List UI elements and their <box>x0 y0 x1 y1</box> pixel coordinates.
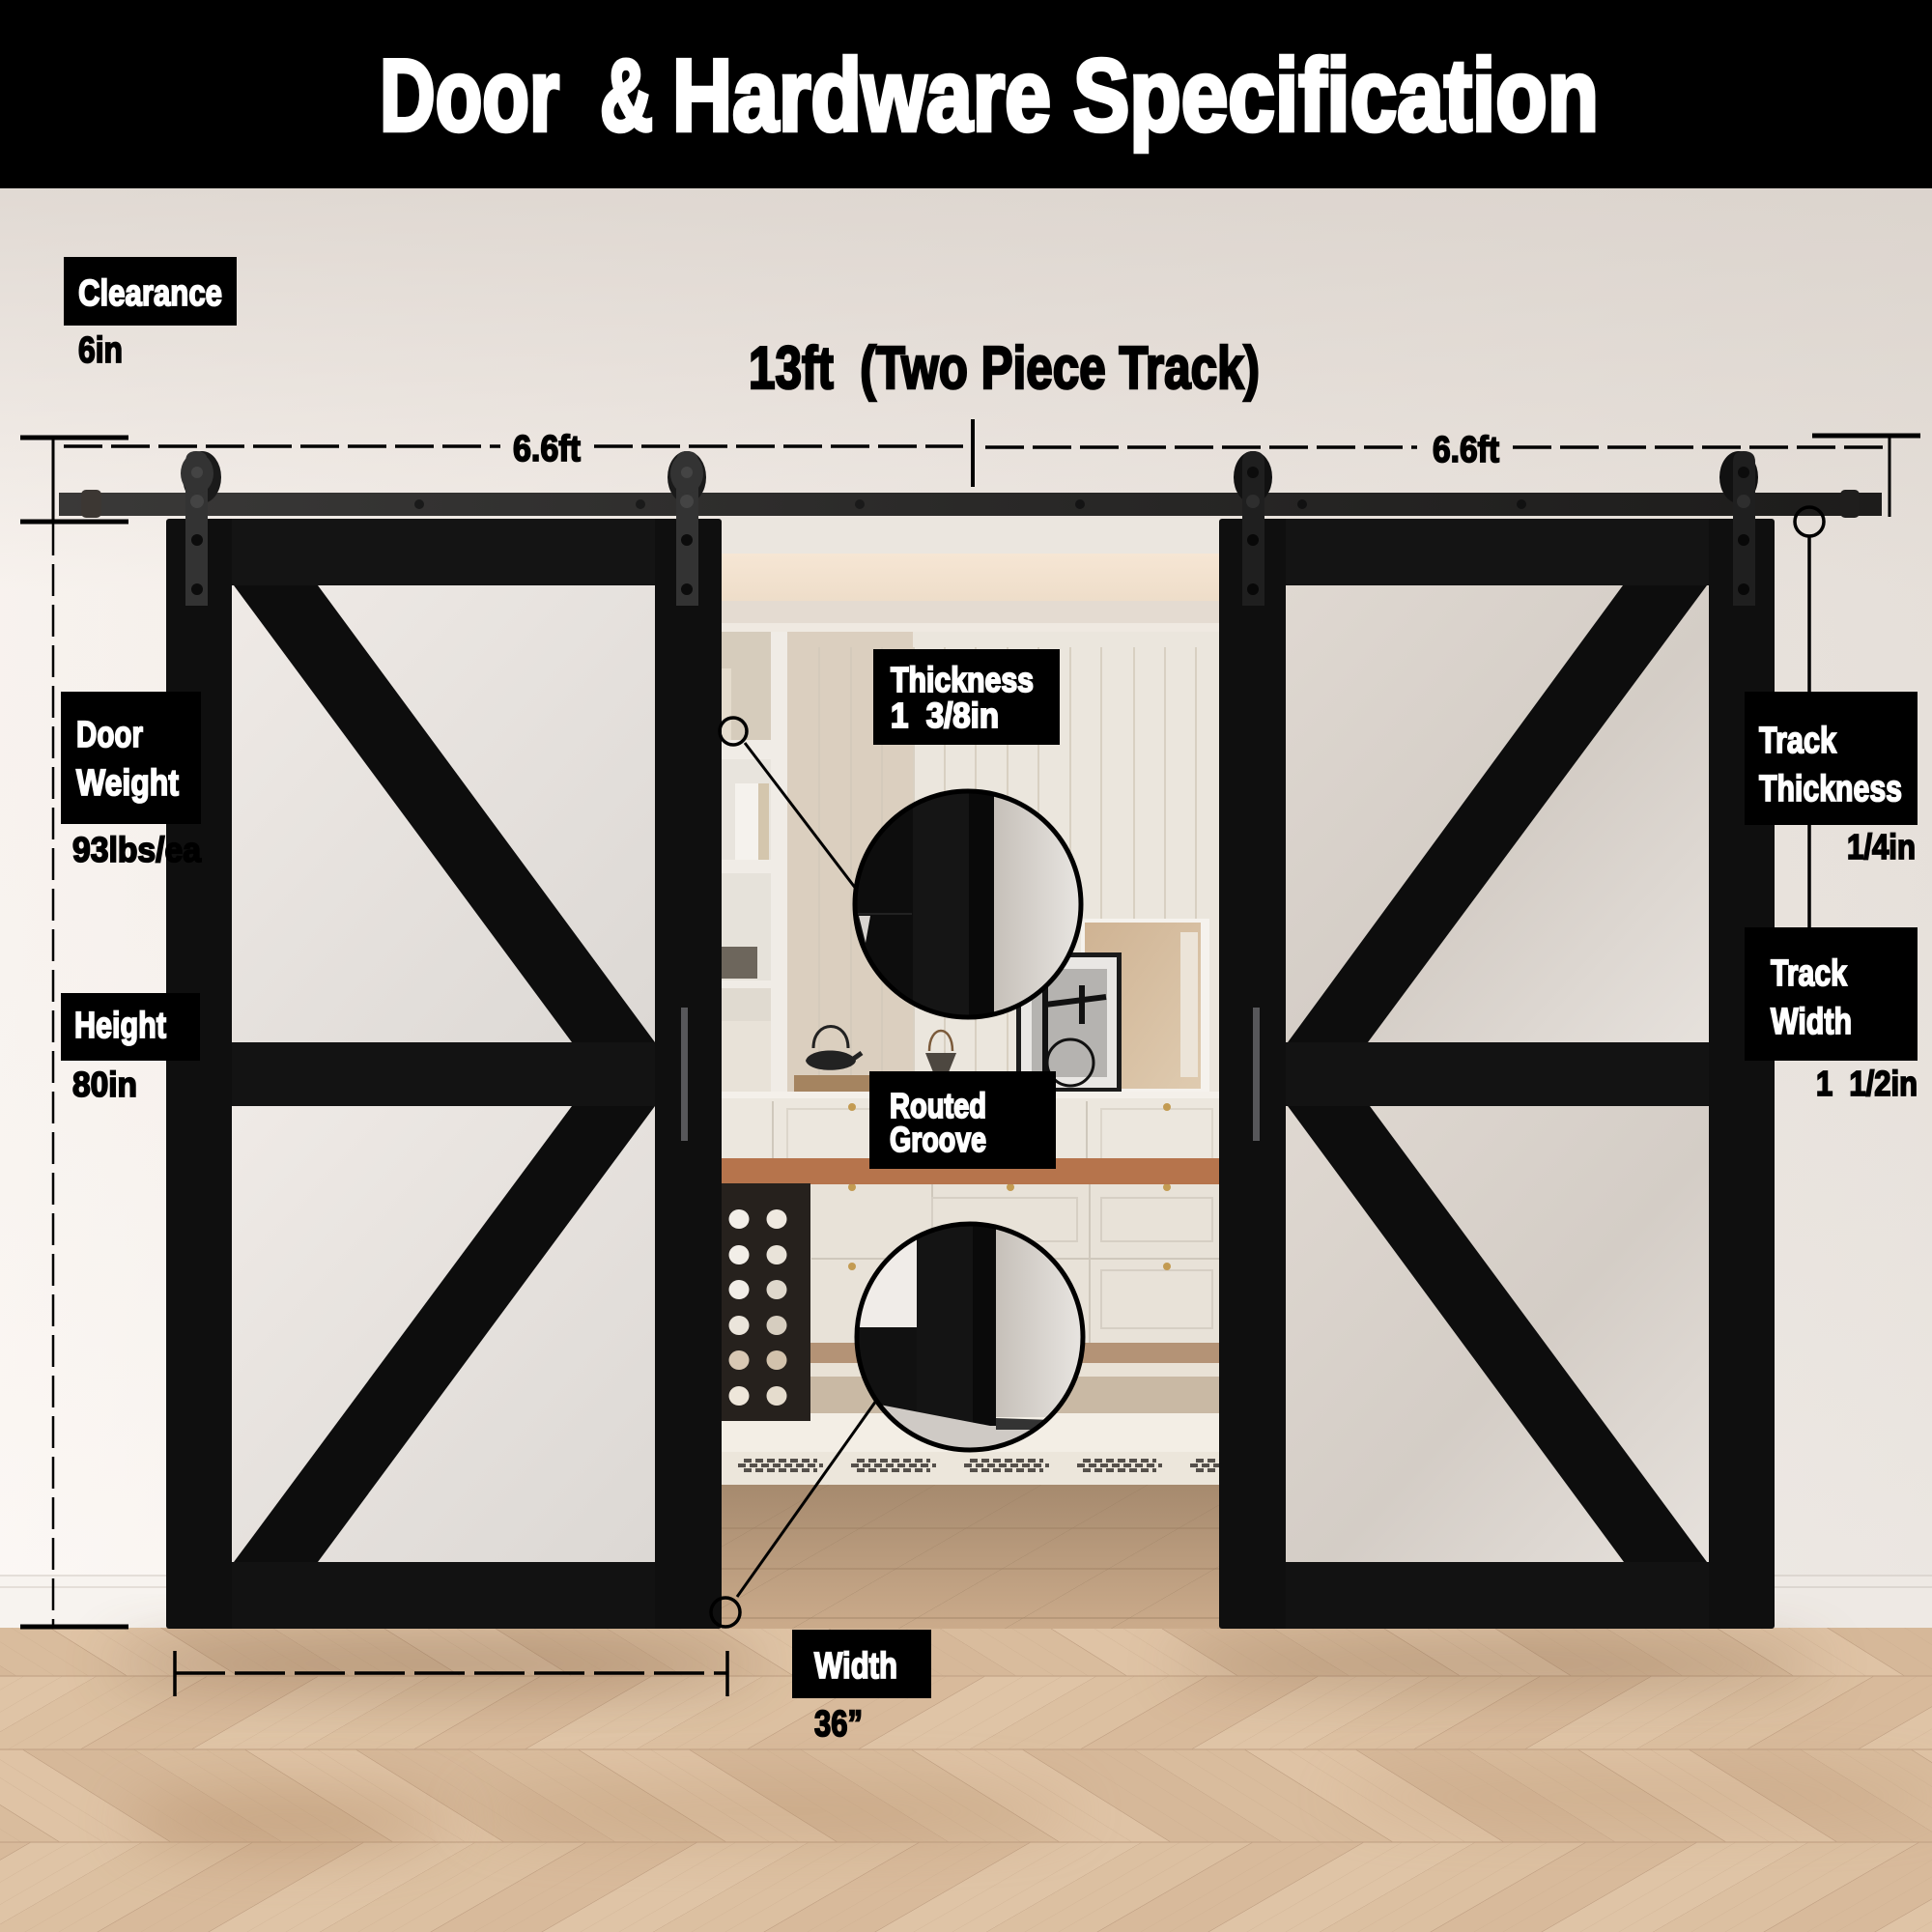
door weight label <box>61 692 201 824</box>
door weight label: Door <box>76 715 143 755</box>
title: & <box>600 39 653 153</box>
height label <box>61 993 200 1061</box>
track length heading: 13ft (Two Piece Track) <box>749 335 1260 402</box>
clearance label: Clearance <box>78 273 222 314</box>
hanger 1 <box>181 451 221 606</box>
routed groove label: Groove <box>890 1120 986 1159</box>
track thickness value: 1/4in <box>1847 827 1916 867</box>
height label: Height <box>74 1006 166 1046</box>
left segment length: 6.6ft <box>513 429 581 469</box>
thickness magnifier <box>855 791 1081 1017</box>
bookshelf <box>722 632 771 1094</box>
handle <box>681 1008 688 1141</box>
right barn door <box>1219 519 1775 1629</box>
door height dimension line <box>20 524 128 1627</box>
track thickness label <box>1745 692 1918 825</box>
wall background <box>0 188 1932 1628</box>
hanger 4 <box>1719 451 1758 606</box>
title <box>380 39 1599 153</box>
thickness label <box>873 649 1060 745</box>
track thickness label: Track <box>1759 721 1837 761</box>
track width value: 1 1/2in <box>1816 1064 1918 1103</box>
track width label: Track <box>1771 953 1848 994</box>
tea kettles and board <box>794 1026 956 1092</box>
height value: 80in <box>72 1065 137 1104</box>
handle <box>1253 1008 1260 1141</box>
track thickness ring and leader <box>1795 507 1824 927</box>
hanger 2 <box>668 451 706 606</box>
hanger 3 <box>1234 451 1272 606</box>
clearance label <box>64 257 237 326</box>
routed groove label: Routed <box>890 1086 986 1125</box>
door width dimension line <box>175 1651 727 1696</box>
thickness label: 1 3/8in <box>891 696 999 735</box>
paneled wall <box>771 632 1220 1095</box>
sliding track rail <box>59 490 1882 518</box>
framed artwork <box>1016 919 1209 1093</box>
track width label: Width <box>1771 1002 1852 1042</box>
right segment length: 6.6ft <box>1433 430 1499 470</box>
pointer to thickness magnifier <box>720 718 856 889</box>
pointer to routed groove magnifier <box>711 1401 876 1627</box>
door weight value: 93lbs/ea <box>72 830 202 869</box>
left barn door <box>166 519 722 1629</box>
width value: 36” <box>814 1704 863 1745</box>
title: Hardware <box>672 39 1051 153</box>
title: Door <box>380 39 559 153</box>
rug and floor <box>722 1343 1220 1629</box>
top track dimension lines <box>20 419 1920 522</box>
door weight label: Weight <box>76 763 179 804</box>
track width label <box>1745 927 1918 1061</box>
lower cabinets <box>722 1092 1220 1343</box>
width label <box>792 1630 931 1698</box>
room seen through the opening <box>722 518 1220 1629</box>
perforated black side panel <box>722 1183 810 1421</box>
width label: Width <box>814 1646 897 1687</box>
routed groove label <box>869 1071 1056 1169</box>
header band <box>0 0 1932 188</box>
routed groove magnifier <box>857 1224 1087 1454</box>
chevron wood floor <box>0 1628 1932 1932</box>
title: Specification <box>1073 39 1599 153</box>
clearance value: 6in <box>78 330 123 371</box>
wooden counter <box>722 1158 1220 1184</box>
thickness label: Thickness <box>891 660 1034 699</box>
